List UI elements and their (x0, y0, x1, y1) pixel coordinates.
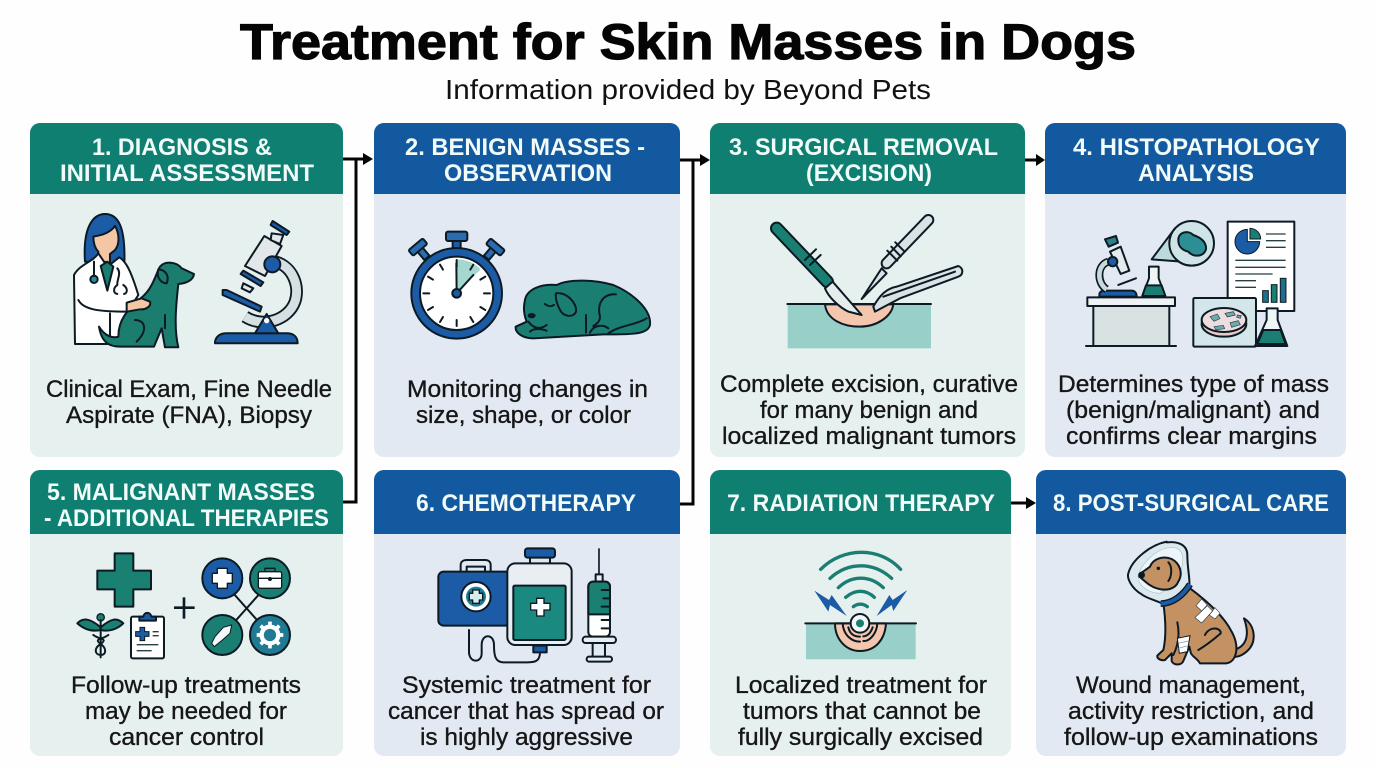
title: Treatment for Skin Masses in Dogs (240, 14, 1136, 70)
body text: panel 3: localized malignant tumors (722, 423, 1016, 450)
body text: panel 5: cancer control (109, 724, 264, 751)
icon: four therapy circles (202, 558, 290, 655)
heading: panel 2: OBSERVATION (444, 160, 612, 187)
icon: sleeping dog (516, 281, 650, 338)
heading: panel 1: INITIAL ASSESSMENT (60, 160, 314, 187)
body text: panel 3: for many benign and (760, 397, 978, 424)
body text: panel 4: (benign/malignant) and (1066, 397, 1320, 424)
icon: vet with dog (74, 214, 194, 347)
heading: panel 2: 2. BENIGN MASSES - (405, 134, 645, 161)
body text: panel 6 (388, 672, 664, 751)
heading: panel 3: 3. SURGICAL REMOVAL (729, 134, 998, 161)
body text: panel 7: fully surgically excised (738, 724, 983, 751)
subtitle: Information provided by Beyond Pets (445, 74, 931, 105)
body text: panel 4: Determines type of mass (1058, 371, 1329, 398)
body text: panel 8: Wound management, (1076, 672, 1306, 699)
icon: stopwatch (408, 232, 505, 339)
icon: dog with cone and bandages (1128, 542, 1254, 664)
heading: panel 2 (405, 134, 645, 187)
heading: panel 8: 8. POST-SURGICAL CARE (1053, 490, 1329, 517)
body text: panel 5 (71, 672, 301, 751)
body text: panel 5: may be needed for (85, 698, 287, 725)
heading: panel 4: ANALYSIS (1138, 160, 1254, 187)
panel: 2 benign masses observation (374, 123, 680, 457)
heading: panel 7: 7. RADIATION THERAPY (727, 490, 995, 517)
panel: 4 histopathology analysis (1045, 123, 1346, 457)
body text: panel 1: Clinical Exam, Fine Needle (46, 376, 332, 403)
body text: panel 3 (720, 371, 1018, 450)
icon: lab bench with microscope, flask and report (1086, 221, 1294, 347)
panel: 5 malignant masses additional therapies (30, 470, 343, 756)
body text: panel 7 (735, 672, 987, 751)
body text: panel 3: Complete excision, curative (720, 371, 1018, 398)
heading: panel 6: 6. CHEMOTHERAPY (416, 490, 636, 517)
icon: medical cross, caduceus and clipboard (77, 553, 164, 658)
body text: panel 6: Systemic treatment for (402, 672, 651, 699)
body text: panel 4 (1058, 371, 1329, 450)
heading: panel 1: 1. DIAGNOSIS & (92, 134, 272, 161)
body text: panel 4: confirms clear margins (1066, 423, 1317, 450)
body text: panel 2: size, shape, or color (416, 402, 631, 429)
body text: panel 6: cancer that has spread or (388, 698, 664, 725)
heading: panel 3 (729, 134, 998, 187)
heading: panel 5: - ADDITIONAL THERAPIES (44, 505, 329, 532)
body text: panel 7: tumors that cannot be (743, 698, 981, 725)
arrow: panel 3 to panel 4 (1025, 154, 1045, 166)
arrow: panels 1 and 5 to panel 2 (343, 153, 373, 502)
body text: panel 2 (407, 376, 648, 429)
panel: 1 diagnosis and initial assessment (30, 123, 343, 457)
icon: radiation beam on tumor (805, 552, 916, 659)
heading: panel 1 (60, 134, 314, 187)
icon: microscope (215, 221, 298, 343)
panel: 6 chemotherapy (374, 470, 680, 756)
body text: panel 8: activity restriction, and (1068, 698, 1314, 725)
heading: panel 4: 4. HISTOPATHOLOGY (1073, 134, 1320, 161)
heading: panel 5 (44, 479, 329, 532)
body text: panel 2: Monitoring changes in (407, 376, 648, 403)
arrow: panels 2 and 6 to panel 3 (680, 154, 710, 504)
body text: panel 6: is highly aggressive (420, 724, 633, 751)
arrow: panel 7 to panel 8 (1011, 497, 1036, 509)
body text: panel 7: Localized treatment for (735, 672, 987, 699)
body text: panel 1: Aspirate (FNA), Biopsy (66, 402, 312, 429)
heading: panel 5: 5. MALIGNANT MASSES (47, 479, 315, 506)
heading: panel 4 (1073, 134, 1320, 187)
icon: surgical excision (777, 220, 962, 348)
panel: 7 radiation therapy (710, 470, 1011, 756)
panel: 3 surgical removal (710, 123, 1025, 457)
body text: panel 1 (46, 376, 332, 429)
body text: panel 5: Follow-up treatments (71, 672, 301, 699)
icon: plus sign (174, 597, 195, 619)
body text: panel 8: follow-up examinations (1064, 724, 1318, 751)
body text: panel 8 (1064, 672, 1318, 751)
heading: panel 3: (EXCISION) (806, 160, 932, 187)
panel: 8 post-surgical care (1036, 470, 1346, 756)
icon: medical case, IV bag and syringe (438, 548, 616, 662)
